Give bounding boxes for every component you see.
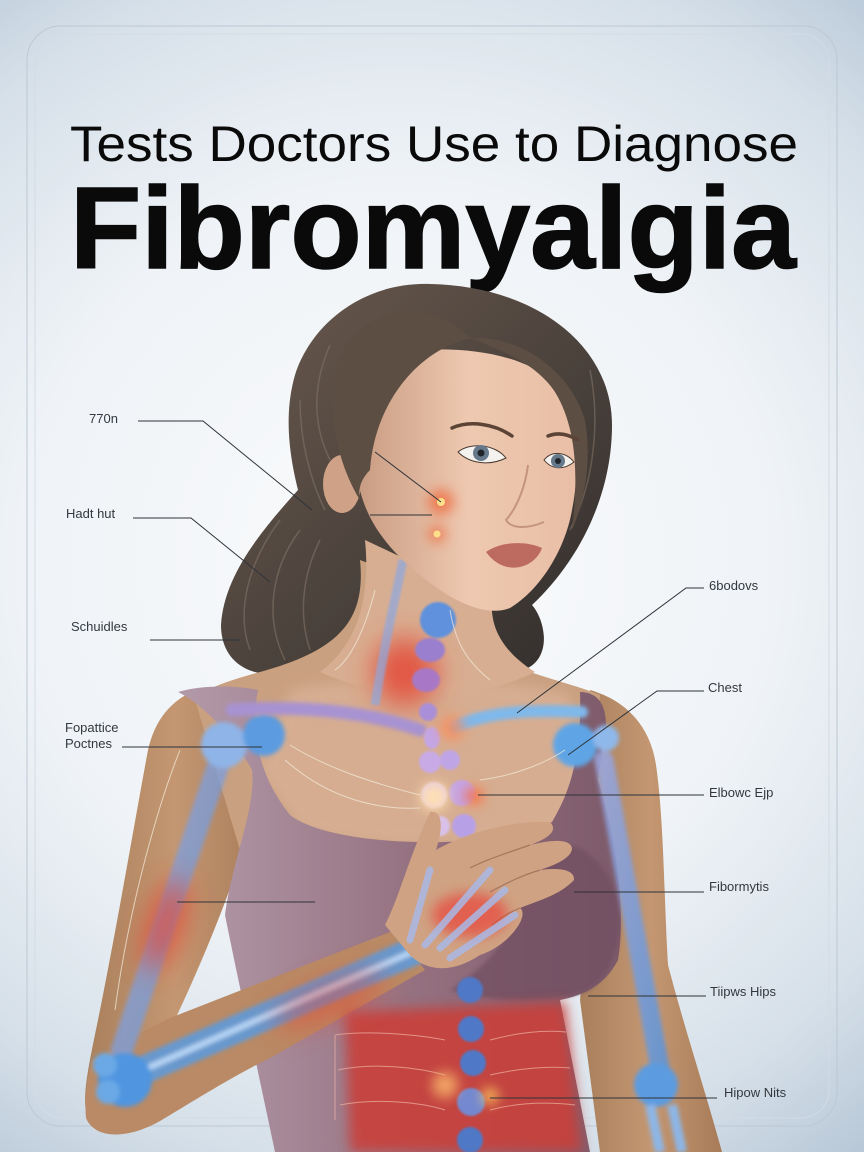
left arm red glow (135, 874, 195, 976)
right labels: Chest (708, 680, 742, 695)
chest highlight (258, 679, 585, 845)
left labels: Poctnes (65, 736, 112, 751)
face pain points (428, 489, 454, 543)
torso upper skin (195, 560, 600, 850)
right labels: 6bodovs (709, 578, 759, 593)
abdomen muscle lines (335, 1031, 575, 1120)
left labels (65, 411, 128, 751)
left labels: Fopattice (65, 720, 118, 735)
neck red glow (373, 638, 437, 706)
nose (506, 465, 544, 527)
tank top (178, 686, 621, 1152)
forearm (85, 930, 425, 1134)
left arm bones (93, 714, 412, 1107)
neck (320, 540, 535, 695)
hand (385, 812, 574, 968)
right labels: Tiipws Hips (710, 984, 776, 999)
chest pain points (420, 716, 498, 1104)
right arm (580, 690, 722, 1152)
right labels: Elbowc Ejp (709, 785, 773, 800)
left upper arm (85, 688, 265, 1128)
eyebrows (452, 424, 578, 440)
clavicles (232, 708, 582, 730)
hair back and bun (221, 284, 612, 674)
title: Tests Doctors Use to Diagnose (70, 116, 798, 172)
lips (486, 543, 542, 568)
left labels: Schuidles (71, 619, 128, 634)
neck nerve band (375, 560, 403, 705)
title: Fibromyalgia (70, 163, 797, 293)
nerve lines (115, 590, 565, 1010)
hair front fringe (333, 312, 588, 530)
face (358, 349, 576, 611)
ear (323, 455, 361, 513)
abdomen red glow (345, 1002, 582, 1152)
right arm bones (553, 723, 682, 1152)
left labels: Hadt hut (66, 506, 116, 521)
leader lines (122, 421, 717, 1098)
bust shade (450, 844, 620, 1000)
hair strands (244, 345, 595, 660)
illustration: woman with skeletal overlay (85, 284, 722, 1152)
right labels: Fibormytis (709, 879, 769, 894)
spine (412, 602, 486, 1152)
left labels: 770n (89, 411, 118, 426)
right labels (708, 578, 787, 1100)
eyes (458, 445, 574, 468)
right labels: Hipow Nits (724, 1085, 787, 1100)
